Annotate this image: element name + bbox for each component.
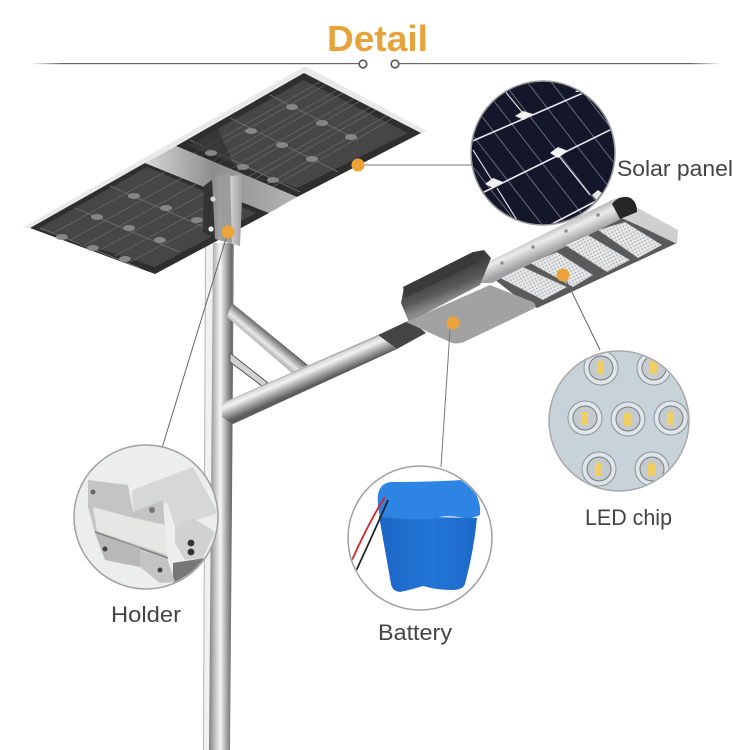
pole top bracket (203, 173, 243, 246)
holder bracket (88, 480, 175, 583)
leader: solar panel (358, 164, 472, 166)
right solar module (176, 73, 421, 197)
callout: holder detail circle (74, 445, 218, 589)
rail rivets (500, 213, 600, 265)
marker: holder (222, 226, 234, 238)
title: Detail (327, 18, 428, 59)
title divider with ring ornaments (30, 60, 722, 68)
battery cover (406, 285, 536, 344)
LED frame (494, 218, 677, 308)
leader: LED chip (566, 280, 600, 350)
leader: holder (162, 232, 228, 448)
rail right end (623, 207, 678, 244)
label: holder: Holder (111, 602, 181, 627)
panel frame (22, 66, 427, 228)
holder bolts (175, 518, 215, 560)
marker: battery (446, 316, 460, 330)
left solar module (30, 163, 269, 274)
marker: solar panel (352, 158, 364, 172)
rail end cap (612, 197, 637, 219)
solar panel assembly (22, 66, 427, 274)
lamp head (401, 197, 678, 344)
housing heat sink (403, 252, 484, 298)
leader: battery (441, 330, 450, 467)
battery housing (401, 250, 491, 322)
marker: LED chip (556, 268, 570, 282)
street light pole (203, 243, 234, 750)
callout: battery detail circle (348, 466, 492, 610)
label: battery: Battery (378, 620, 452, 645)
lower brace (230, 353, 268, 386)
callout: solar panel detail circle (470, 80, 616, 226)
silver rail (478, 197, 623, 283)
lamp arm (222, 320, 426, 424)
label: LED chip: LED chip (585, 505, 672, 530)
LED chip lenses (568, 351, 688, 486)
battery pack (378, 480, 480, 592)
upper brace (227, 303, 308, 373)
holder block (132, 467, 218, 527)
callout: LED chip detail circle (549, 351, 689, 491)
holder underside (173, 558, 204, 583)
battery wires (352, 497, 388, 571)
label: solar panel: Solar panel (617, 156, 733, 181)
LED modules (500, 222, 662, 300)
cross bracket (145, 146, 297, 213)
